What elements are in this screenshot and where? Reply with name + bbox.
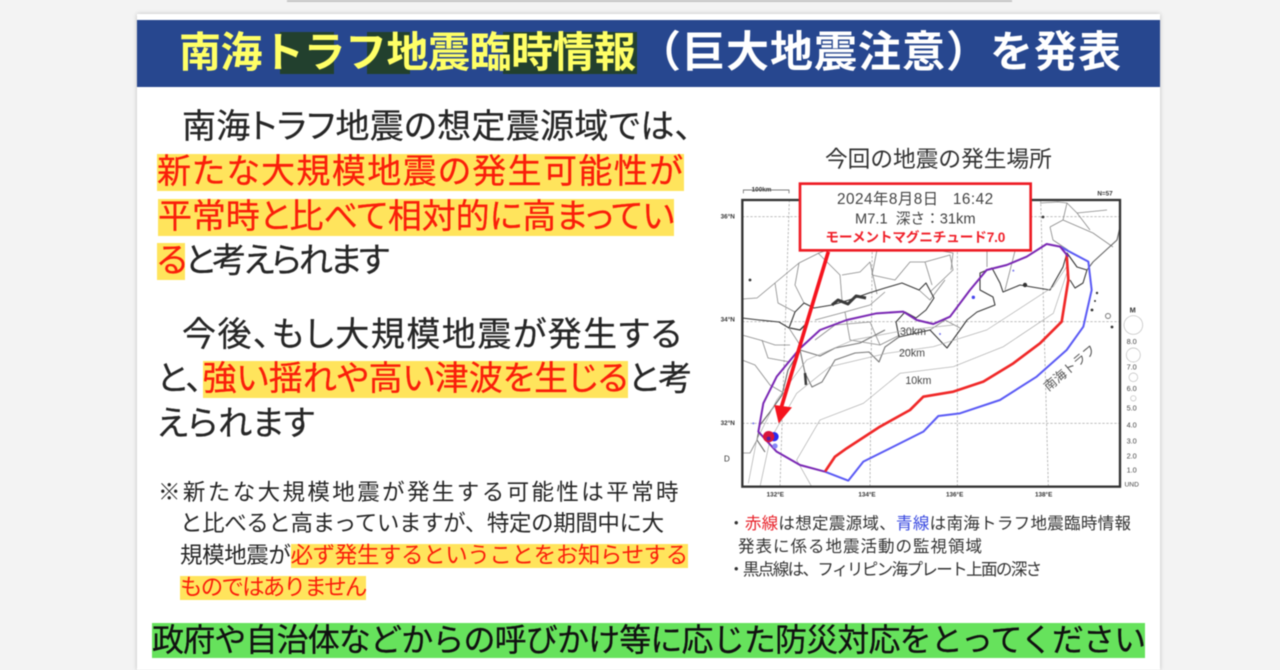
note text: ※新たな大規模地震が発生する可能性は平常時 <box>158 480 681 505</box>
red source region <box>825 255 1068 472</box>
map caption <box>728 514 1131 579</box>
map axis labels: 134°E <box>858 491 876 499</box>
magnitude legend: UND <box>1124 482 1139 489</box>
paragraph 1: 平常時と比べて相対的に高まってい <box>158 198 674 236</box>
title banner <box>137 20 1160 87</box>
title highlight rectangles <box>280 32 638 74</box>
island outline <box>1106 314 1110 318</box>
prefecture boundaries <box>742 202 1113 453</box>
magnitude legend: 1.0 <box>1127 466 1137 475</box>
map axis labels: 136°E <box>946 491 963 499</box>
land and boundaries traced in page coordinates <box>742 202 1120 453</box>
trough label: 南海トラフ <box>1041 342 1099 394</box>
callout box: 2024年8月8日 16:42 <box>837 191 994 208</box>
depth labels: 30km <box>900 326 926 338</box>
magnitude legend: M <box>1130 306 1136 315</box>
coastlines <box>742 227 1120 452</box>
map axis labels: 138°E <box>1035 491 1052 499</box>
purple shared boundary <box>758 244 1068 472</box>
magnitude legend: 3.0 <box>1127 436 1137 445</box>
paragraph 1: 新たな大規模地震の発生可能性が <box>157 153 684 191</box>
callout box <box>800 184 1031 250</box>
note text: 必ず発生するということをお知らせする <box>291 543 688 568</box>
title: highlighted part: 南海トラフ地震臨時情報 <box>179 29 636 76</box>
plate depth contours <box>748 267 1067 487</box>
map axis labels: D <box>724 455 730 464</box>
islands <box>749 216 1113 328</box>
map axis labels: 132°E <box>767 491 784 499</box>
paragraph 2: えられます <box>157 405 315 443</box>
map axis labels: 100km <box>752 187 772 194</box>
map axis labels: 34°N <box>721 316 735 324</box>
magnitude legend: 8.0 <box>1127 337 1137 346</box>
paragraph 2 <box>157 316 692 443</box>
depth labels <box>899 326 932 387</box>
epicenter cluster <box>752 270 1014 449</box>
slide panel <box>137 14 1160 670</box>
paragraph 1 <box>156 108 692 281</box>
note text: ものではありません <box>180 575 366 600</box>
map frame <box>742 200 1120 487</box>
depth labels: 10km <box>905 375 932 387</box>
note text: と比べると高まっていますが、特定の期間中に大 <box>180 511 664 536</box>
paragraph 1: と考えられます <box>185 242 387 280</box>
map grid <box>742 200 1120 487</box>
magnitude legend: 5.0 <box>1127 403 1137 412</box>
map caption: 発表に係る地震活動の監視領域 <box>738 538 983 556</box>
note text: 規模地震が <box>180 543 291 568</box>
map axis labels: N=57 <box>1097 191 1113 198</box>
green call to action: 政府や自治体などからの呼びかけ等に応じた防災対応をとってください <box>152 622 1145 658</box>
paragraph 2: と、 と考 <box>157 360 692 398</box>
paragraph 2: 今後、もし大規模地震が発生する <box>182 316 683 354</box>
map caption: ・赤線は想定震源域、青線は南海トラフ地震臨時情報 <box>728 515 1131 533</box>
note text <box>158 480 689 601</box>
magnitude legend: 6.0 <box>1127 384 1137 393</box>
map axis labels: 32°N <box>721 419 735 427</box>
paragraph 2: 強い揺れや高い津波を生じる <box>203 360 628 398</box>
map caption: ・黒点線は、フィリピン海プレート上面の深さ <box>728 561 1041 579</box>
paragraph 1: る <box>157 242 185 280</box>
map heading: 今回の地震の発生場所 <box>825 146 1052 172</box>
red arrow <box>774 252 828 423</box>
scale bar <box>743 190 789 193</box>
magnitude legend <box>1124 306 1143 489</box>
map axis labels <box>721 187 1113 499</box>
title: white part: （巨大地震注意）を発表 <box>638 29 1122 77</box>
blue monitoring area <box>825 247 1092 481</box>
magnitude legend: 7.0 <box>1127 362 1137 371</box>
top neighbouring slide edge <box>287 0 1012 2</box>
callout box: モーメントマグニチュード7.0 <box>825 229 1006 245</box>
map <box>720 182 1144 499</box>
depth labels: 20km <box>899 348 925 360</box>
callout box: M7.1 深さ：31km <box>855 210 976 227</box>
map axis labels: 36°N <box>721 213 735 221</box>
paragraph 1: 南海トラフ地震の想定震源域では、 <box>182 108 692 146</box>
magnitude legend: 2.0 <box>1127 451 1137 460</box>
magnitude legend: 4.0 <box>1127 421 1137 430</box>
